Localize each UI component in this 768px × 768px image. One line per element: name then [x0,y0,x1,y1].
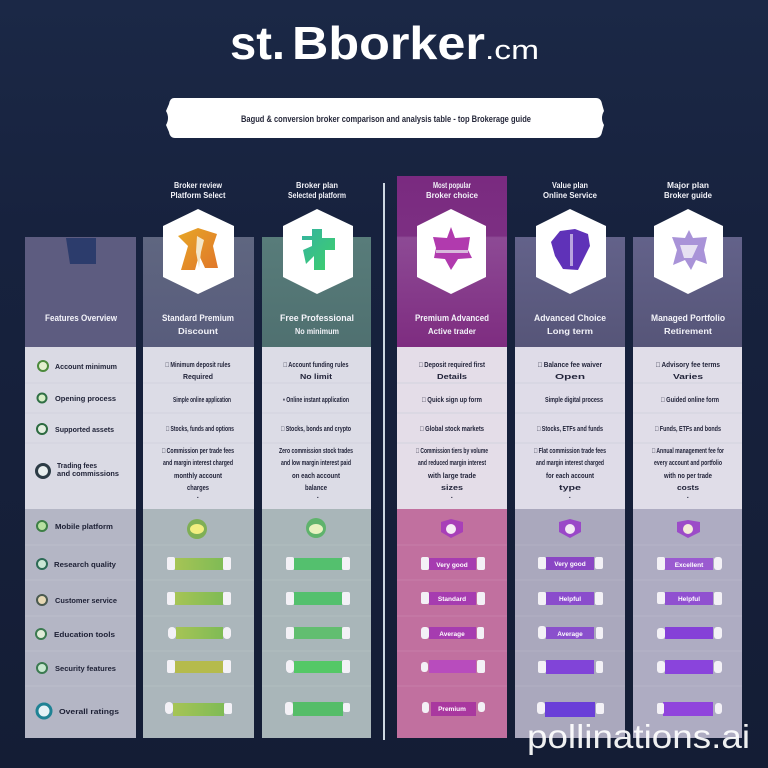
center divider [383,183,385,740]
detail rows: Details [437,372,467,381]
hexagon badge [163,209,234,294]
detail rows: □ Commission tiers by volume [416,446,488,455]
detail rows: for each account [546,471,594,480]
panel: broker 4 (violet) [515,181,625,738]
detail rows: on each account [292,471,340,480]
detail rows: □ Commission per trade fees [162,446,234,455]
detail rows: ▪ Online instant application [283,395,349,404]
broker label [543,181,598,200]
lower feature rows: Education tools [54,630,115,639]
detail rows: □ Deposit required first [419,360,485,369]
rating rows: Helpful [559,596,581,603]
detail rows: sizes [441,483,463,492]
panel: broker 1 (orange) [143,181,254,738]
detail rows: · [687,493,689,502]
column heading [415,313,489,336]
column heading: Standard Premium [162,313,234,323]
detail rows: Zero commission stock trades [279,446,353,455]
lower feature rows: Customer service [55,596,117,605]
broker label [664,181,713,200]
column heading: No minimum [295,327,339,336]
detail rows: and margin interest charged [163,458,233,467]
lower feature rows: Research quality [54,560,117,569]
upper feature rows: Opening process [55,394,116,403]
detail rows: □ Global stock markets [420,424,484,433]
subtitle banner [166,98,604,138]
broker label: Broker choice [426,191,479,200]
rating rows [515,509,625,738]
broker label: Broker guide [664,191,713,200]
column header [515,237,625,347]
column header [25,237,136,347]
detail rows: and low margin interest paid [281,458,351,467]
rating rows [262,509,371,738]
broker label [426,181,479,200]
hexagon badge [417,209,486,294]
detail rows: □ Balance fee waiver [538,360,602,369]
title: Bborker [292,17,485,69]
detail rows: · [317,493,319,502]
rating rows: Very good [554,561,586,568]
rating rows: Average [439,631,465,638]
panel: broker 2 (green) [262,181,371,738]
panel: broker 5 (lavender) [633,181,742,738]
column heading [651,313,725,336]
icon: violet shield [551,229,590,270]
column header [143,237,254,347]
detail rows: and reduced margin interest [418,458,486,467]
broker label: Value plan [552,181,588,190]
detail rows: □ Stocks, bonds and crypto [281,424,351,433]
column heading [534,313,606,336]
detail rows: with large trade [427,471,476,480]
panel: broker 3 (highlighted magenta) [397,176,507,738]
hexagon badge [283,209,353,294]
detail rows [143,347,254,509]
column header [397,176,507,347]
icon: folder [66,238,96,264]
detail rows: □ Account funding rules [284,360,348,369]
column heading: Discount [178,327,218,336]
detail rows [397,347,507,509]
detail rows: costs [677,483,699,492]
detail rows: monthly account [174,471,222,480]
icon: magenta star [433,227,472,270]
rating rows: Excellent [675,562,704,569]
lower feature rows: Security features [55,664,116,673]
watermark: pollinations.ai [527,718,750,755]
lower feature rows: Mobile platform [55,522,113,531]
lower feature rows [25,509,136,738]
column heading: Managed Portfolio [651,313,725,323]
lower feature rows: Overall ratings [59,707,119,716]
detail rows: every account and portfolio [654,458,722,467]
rating rows: Average [557,631,583,638]
detail rows: □ Guided online form [661,395,719,404]
detail rows [633,347,742,509]
detail rows: □ Stocks, funds and options [166,424,234,433]
column heading: Advanced Choice [534,313,606,323]
column heading: Free Professional [280,313,354,323]
broker label [288,181,346,200]
upper feature rows: Supported assets [55,425,114,434]
icon: green emblem [302,229,335,270]
detail rows: · [197,493,199,502]
detail rows: □ Advisory fee terms [656,360,720,369]
detail rows: □ Flat commission trade fees [534,446,606,455]
detail rows: type [559,483,581,492]
column header [633,237,742,347]
icon: orange emblem [178,228,218,270]
broker label: Broker plan [296,181,338,190]
upper feature rows: and commissions [57,469,119,478]
column heading: Long term [547,327,593,336]
broker label [170,181,226,200]
title [230,17,539,69]
hexagon badge [536,209,606,294]
rating rows: Helpful [678,596,700,603]
broker label: Broker review [174,181,223,190]
column heading [280,313,354,336]
rating rows [397,509,507,738]
column header [262,237,371,347]
detail rows: and margin interest charged [536,458,604,467]
detail rows: No limit [300,372,333,381]
broker label: Most popular [433,181,471,190]
detail rows: Simple digital process [545,395,603,404]
detail rows [515,347,625,509]
detail rows: · [569,493,571,502]
detail rows: charges [187,483,209,492]
detail rows: balance [305,483,327,492]
title: st. [230,17,285,69]
column heading: Retirement [664,327,712,336]
upper feature rows [25,347,136,509]
detail rows: □ Quick sign up form [422,395,482,404]
broker label: Platform Select [170,191,226,200]
broker label: Major plan [667,181,709,190]
subtitle banner: Bagud & conversion broker comparison and analysis table - top Brokerage guide [241,114,531,124]
rating rows [633,509,742,738]
column heading: Active trader [428,327,476,336]
column heading [162,313,234,336]
detail rows: □ Minimum deposit rules [166,360,230,369]
detail rows [262,347,371,509]
broker label: Online Service [543,191,598,200]
detail rows: □ Stocks, ETFs and funds [537,424,603,433]
panel: feature labels column [25,237,136,738]
hexagon badge [654,209,723,294]
detail rows: Open [555,372,586,381]
upper feature rows: Account minimum [55,362,117,371]
rating rows: Standard [438,596,466,603]
detail rows: Simple online application [173,395,231,404]
detail rows: Required [183,372,213,381]
broker label: Selected platform [288,191,346,200]
detail rows: · [451,493,453,502]
column heading: Premium Advanced [415,313,489,323]
rating rows: Premium [438,706,466,713]
rating rows [143,509,254,738]
rating rows: Very good [436,562,468,569]
column heading: Features Overview [45,313,118,323]
detail rows: with no per trade [663,471,712,480]
icon: lavender star [672,230,707,270]
detail rows: □ Funds, ETFs and bonds [655,424,721,433]
detail rows: Varies [673,372,703,381]
detail rows: □ Annual management fee for [652,446,724,455]
upper feature rows: Trading fees [57,461,97,470]
title: .cm [485,35,539,65]
